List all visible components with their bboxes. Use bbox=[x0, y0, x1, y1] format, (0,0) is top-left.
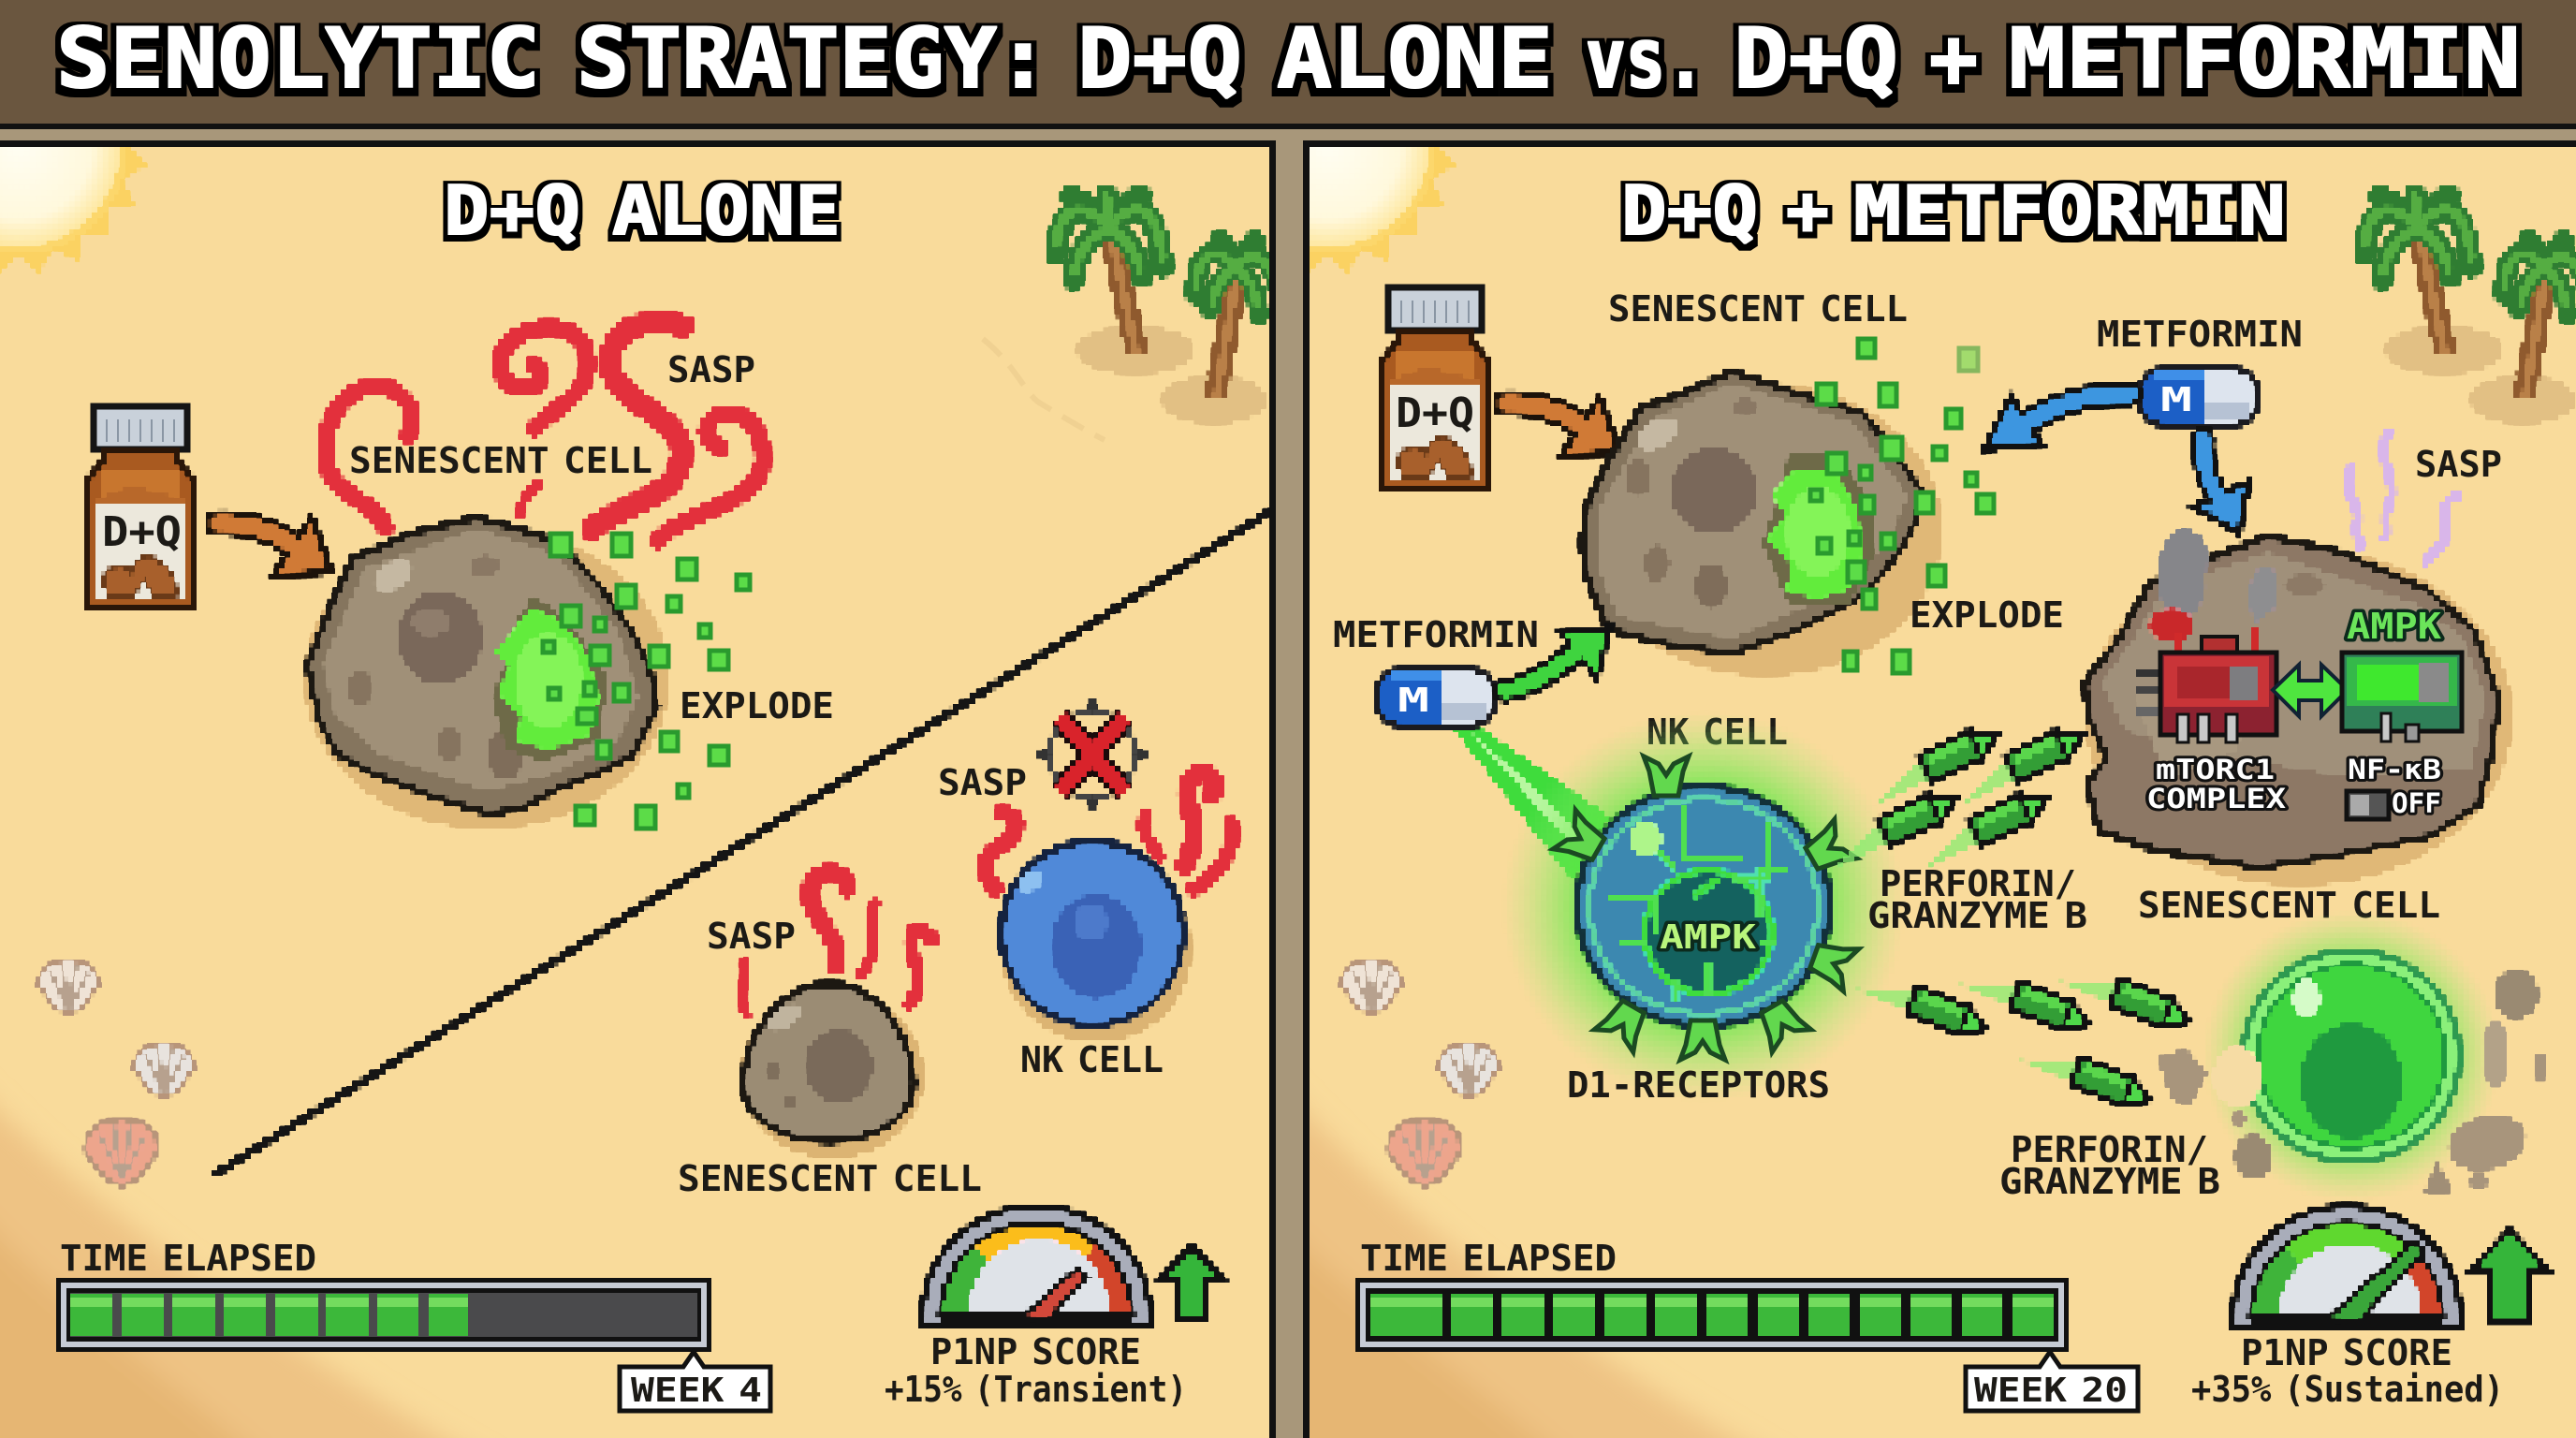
senescent cell exploding bbox=[304, 518, 669, 829]
missile bbox=[1956, 961, 2093, 1037]
panel: D+Q alone bbox=[0, 37, 1283, 1438]
label: off: OFF bbox=[2392, 787, 2441, 819]
label: senescent cell: SENESCENT CELL bbox=[349, 440, 652, 481]
title: D+Q bbox=[1077, 10, 1242, 107]
label: metformin left: METFORMIN bbox=[1333, 614, 1539, 655]
perforin missiles upper bbox=[1825, 723, 2088, 870]
missile bbox=[1916, 786, 2052, 870]
label: P1NP score: P1NP SCORE bbox=[930, 1331, 1141, 1372]
cell debris bbox=[2158, 970, 2548, 1196]
label: time elapsed: TIME ELAPSED bbox=[1360, 1238, 1617, 1279]
sun bbox=[0, 147, 148, 274]
heading: + bbox=[1786, 171, 1829, 250]
metformin pill left bbox=[1375, 667, 1497, 728]
D+Q bottle bbox=[86, 408, 195, 608]
bottle label: D+Q bbox=[1396, 389, 1474, 437]
perforin missiles lower bbox=[1853, 958, 2193, 1113]
label: SASP near cell: SASP bbox=[707, 916, 796, 957]
sun bbox=[1219, 37, 1455, 272]
label: NK cell: NK CELL bbox=[1647, 712, 1788, 753]
darker sand corner bbox=[1273, 1077, 1797, 1438]
label: AMPK in NK nucleus: AMPK bbox=[1660, 918, 1756, 957]
AMPK machine bbox=[2342, 653, 2462, 741]
title: + bbox=[1929, 10, 1978, 107]
shell one bbox=[1341, 960, 1401, 1014]
senescent cell with machinery bbox=[2085, 530, 2512, 886]
green particles bbox=[543, 534, 750, 829]
label: perforin lower bbox=[1999, 1129, 2220, 1202]
shell one bbox=[38, 960, 98, 1014]
heading: D+Q bbox=[1621, 171, 1758, 250]
heading bbox=[1621, 171, 2286, 250]
label: mTORC1: mTORC1 bbox=[2156, 754, 2275, 785]
palm tree small bbox=[1162, 241, 1283, 424]
label: perforin lower: GRANZYME B bbox=[1999, 1161, 2220, 1202]
SASP tendrils bbox=[325, 323, 763, 541]
label: SASP: SASP bbox=[667, 349, 755, 390]
activated NK cell bbox=[1502, 712, 1905, 1101]
heading: D+Q bbox=[444, 171, 580, 250]
label: metformin top: METFORMIN bbox=[2097, 314, 2303, 355]
arrow: score up bbox=[1160, 1247, 1223, 1318]
arrow: D+Q to cell bbox=[1505, 398, 1619, 456]
gauge: P1NP score bbox=[919, 1203, 1153, 1329]
label: time elapsed: TIME ELAPSED bbox=[60, 1238, 316, 1279]
label: NF-kB: NF-κB bbox=[2348, 754, 2441, 785]
heading bbox=[444, 171, 841, 250]
SASP tendrils on small cell bbox=[742, 873, 932, 1016]
title: STRATEGY: bbox=[577, 10, 1049, 107]
missile bbox=[1825, 786, 1961, 870]
lysed green cell bbox=[2203, 911, 2499, 1201]
title: ALONE bbox=[1277, 10, 1553, 107]
missile bbox=[1953, 723, 2088, 806]
missile bbox=[2017, 1036, 2154, 1113]
missile bbox=[1866, 723, 2002, 806]
progress bar week 20 bbox=[1355, 1278, 2069, 1352]
progress bar week 4 bbox=[56, 1278, 711, 1352]
label: senescent cell lower: SENESCENT CELL bbox=[2138, 885, 2440, 926]
arrow: score up bbox=[2472, 1230, 2547, 1320]
missile bbox=[2056, 958, 2193, 1034]
shell two bbox=[1439, 1043, 1499, 1097]
beam from pill to NK cell bbox=[1454, 728, 1610, 880]
smoke bbox=[2157, 530, 2207, 623]
double arrow between machines bbox=[2273, 665, 2348, 716]
sand tracks bbox=[983, 339, 1105, 440]
shell three bbox=[1389, 1120, 1460, 1185]
label: perforin upper: PERFORIN/ bbox=[1880, 863, 2076, 904]
shells bbox=[38, 960, 194, 1185]
shell three bbox=[86, 1120, 157, 1185]
label: +35% sustained: +35% (Sustained) bbox=[2191, 1369, 2504, 1410]
label: D1 receptors: D1-RECEPTORS bbox=[1567, 1064, 1830, 1106]
panel background bbox=[1310, 146, 2576, 1438]
label: perforin upper bbox=[1867, 863, 2087, 936]
title: D+Q bbox=[1734, 10, 1898, 107]
D+Q bottle bbox=[1381, 289, 1489, 489]
label: senescent cell bottom: SENESCENT CELL bbox=[678, 1158, 982, 1199]
title bbox=[56, 10, 2521, 107]
title: METFORMIN bbox=[2009, 10, 2521, 107]
SASP tendrils on NK cell bbox=[985, 773, 1232, 889]
pill art bbox=[1375, 667, 1497, 728]
header bar bbox=[0, 0, 2576, 129]
callout: week 20 bbox=[1966, 1352, 2138, 1411]
bottle label: D+Q bbox=[102, 508, 182, 556]
senescent cell exploding bbox=[1582, 372, 1942, 676]
label: perforin upper: GRANZYME B bbox=[1867, 895, 2087, 936]
heading: ALONE bbox=[612, 171, 841, 250]
shell two bbox=[134, 1043, 194, 1097]
green particles bbox=[1810, 339, 1994, 673]
arrow: metformin to lower cell bbox=[2194, 438, 2248, 533]
bottle art bbox=[86, 408, 195, 608]
panel background bbox=[0, 146, 1269, 1438]
callout: week 4 bbox=[620, 1352, 770, 1411]
label: NK cell: NK CELL bbox=[1020, 1039, 1164, 1080]
shells bbox=[1341, 960, 1499, 1185]
label: senescent cell: SENESCENT CELL bbox=[1608, 288, 1908, 330]
label: SASP near NK: SASP bbox=[938, 762, 1027, 803]
palm tree bbox=[2364, 195, 2503, 374]
faded SASP wisps bbox=[2349, 432, 2458, 562]
pill letter: M bbox=[1398, 682, 1429, 720]
label: explode: EXPLODE bbox=[1910, 594, 2064, 636]
arrow: metformin up bbox=[1505, 627, 1610, 691]
icon: blocked target bbox=[1038, 700, 1147, 809]
timeline divider line bbox=[217, 513, 1267, 1173]
pill letter: M bbox=[2160, 381, 2192, 419]
gauge: P1NP score bbox=[2230, 1203, 2464, 1331]
label: AMPK on machine: AMPK bbox=[2347, 606, 2441, 647]
darker sand corner bbox=[0, 1107, 449, 1438]
callout: week 20: WEEK 20 bbox=[1974, 1372, 2128, 1410]
label: +15% transient: +15% (Transient) bbox=[885, 1369, 1187, 1410]
switch off bbox=[2347, 787, 2441, 819]
callout: week 4: WEEK 4 bbox=[631, 1372, 762, 1410]
title: SENOLYTIC bbox=[56, 10, 540, 107]
missile bbox=[1853, 965, 1990, 1042]
pill art bbox=[2138, 366, 2260, 428]
bottle art bbox=[1381, 289, 1489, 489]
heading: METFORMIN bbox=[1853, 171, 2286, 250]
metformin pill top bbox=[2138, 366, 2260, 428]
label: explode: EXPLODE bbox=[680, 685, 834, 726]
label: perforin lower: PERFORIN/ bbox=[2011, 1129, 2208, 1170]
D1 receptors bbox=[1553, 756, 1859, 1060]
panel: D+Q + metformin bbox=[1219, 37, 2576, 1438]
arrow: D+Q to cell bbox=[217, 518, 331, 576]
NK cell bbox=[1001, 842, 1192, 1042]
arrow: metformin to cell bbox=[1984, 394, 2130, 449]
label: SASP: SASP bbox=[2415, 444, 2502, 485]
mTORC1 complex machine bbox=[2136, 627, 2276, 742]
palm tree small bbox=[2470, 241, 2576, 424]
small senescent cell bbox=[740, 984, 924, 1158]
label: complex: COMPLEX bbox=[2146, 783, 2287, 814]
title: vs. bbox=[1586, 10, 1705, 107]
label: P1NP score: P1NP SCORE bbox=[2241, 1332, 2452, 1373]
palm tree bbox=[1056, 195, 1194, 374]
